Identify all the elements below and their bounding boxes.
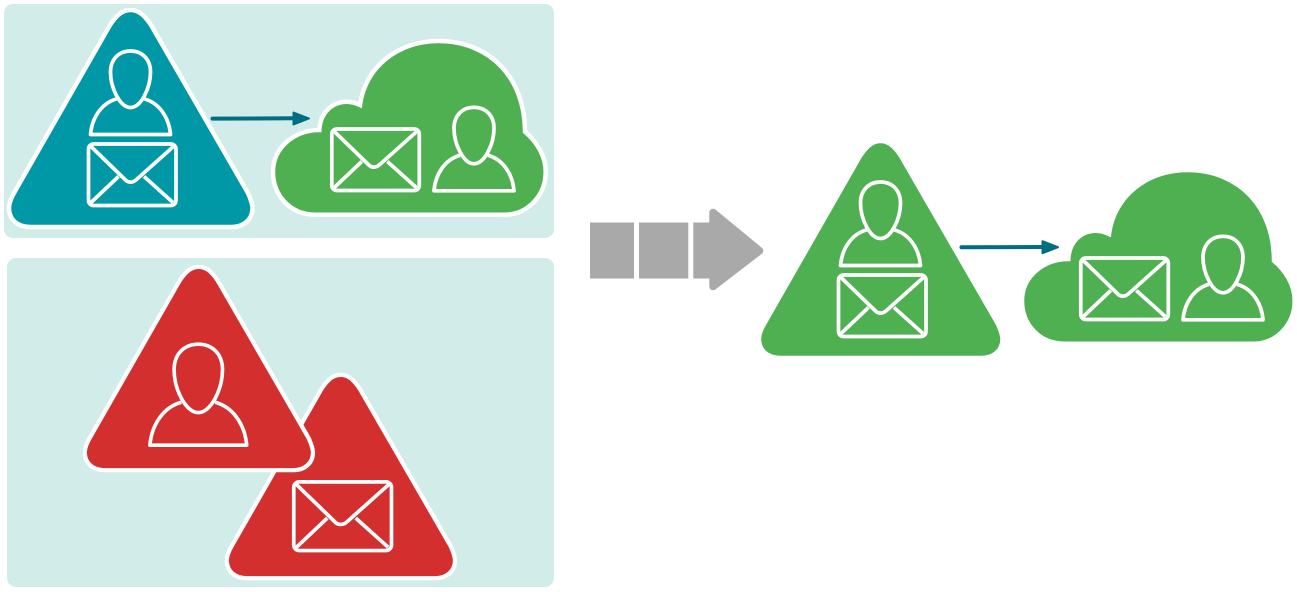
icon: person [840, 182, 920, 266]
teal triangle with person and envelope [9, 10, 252, 227]
icon: envelope [838, 275, 926, 336]
icon: envelope [88, 144, 176, 206]
green cloud with envelope and person [273, 41, 546, 215]
triangle shape [9, 10, 252, 227]
icon: person [150, 344, 247, 445]
panel: bottom, separate red triangles [7, 258, 554, 587]
green triangle with person and envelope [759, 141, 1002, 358]
icon: person [434, 107, 514, 191]
green cloud with envelope and person [1022, 170, 1295, 344]
triangle shape [227, 375, 455, 578]
cloud shape [273, 41, 546, 215]
icon: person [90, 51, 170, 134]
panel background [4, 4, 554, 238]
icon: envelope [1081, 258, 1168, 320]
result: green triangle to green cloud [759, 141, 1295, 358]
panel background [7, 258, 554, 587]
icon: envelope [332, 129, 419, 190]
triangle shape [759, 141, 1002, 358]
arrow: teal triangle to cloud [212, 112, 309, 124]
icon: person [1183, 236, 1263, 320]
cloud shape [1022, 170, 1295, 344]
arrow: green triangle to cloud [962, 241, 1058, 253]
red triangle with envelope [227, 375, 455, 578]
icon: envelope [294, 482, 391, 551]
red triangle with person [85, 267, 313, 470]
triangle shape [85, 267, 313, 470]
panel: top, teal sender to green cloud [4, 4, 554, 238]
arrow: large grey transition arrow [590, 209, 763, 290]
